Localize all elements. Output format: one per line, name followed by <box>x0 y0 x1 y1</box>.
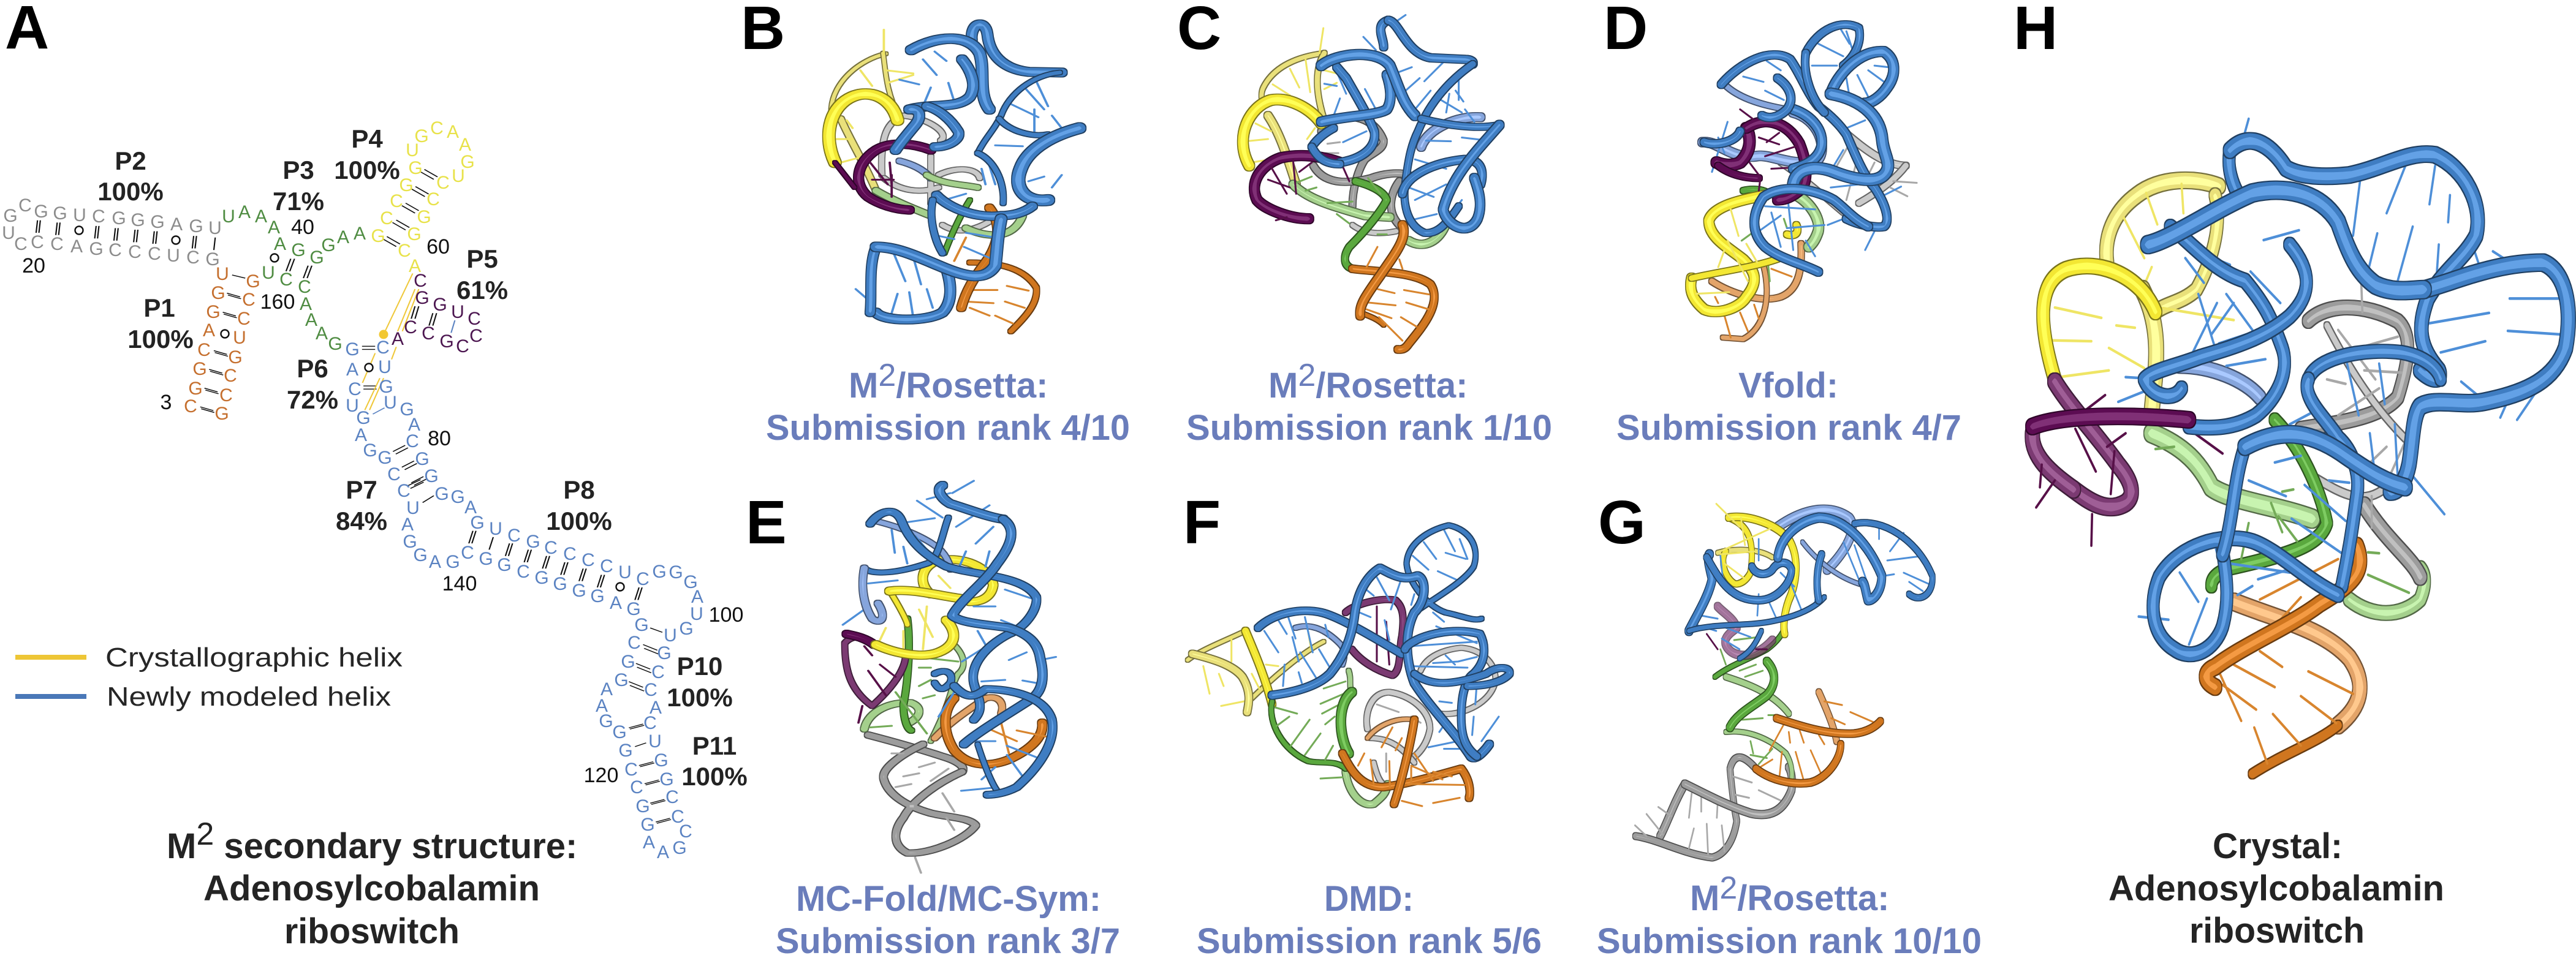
helix labels with percentages: P11 <box>692 731 737 760</box>
helix labels with percentages: P10 <box>677 652 722 681</box>
panel A caption: M <box>167 826 196 866</box>
caption C <box>1186 358 1552 448</box>
legend <box>15 643 403 712</box>
heading: panel letter E: E <box>746 488 787 557</box>
panel A caption: riboswitch <box>284 911 460 951</box>
3D model B <box>829 25 1079 331</box>
caption C: /Rosetta: <box>1316 366 1468 405</box>
helix labels with percentages: P3 <box>282 156 314 184</box>
panel H: crystal structure <box>2013 0 2568 951</box>
caption B: 2 <box>878 358 896 393</box>
caption G: 2 <box>1719 870 1737 906</box>
wobble pair circles and tertiary dot <box>75 227 624 590</box>
residue numbers <box>22 216 743 787</box>
helix labels with percentages: P1 <box>143 293 175 322</box>
helix labels with percentages: P5 <box>466 244 498 273</box>
panel A: secondary structure <box>2 0 748 951</box>
nucleotide sequence letters: UAAAAGGGAA <box>222 202 366 268</box>
panel A caption: 2 <box>196 817 214 852</box>
caption G <box>1597 870 1982 958</box>
residue numbers: 100 <box>709 603 743 627</box>
3D model D <box>1691 25 1917 339</box>
caption G: M <box>1690 878 1719 918</box>
panel F: DMD rank 5/6 <box>1183 488 1542 958</box>
caption G: /Rosetta: <box>1737 878 1889 918</box>
nucleotide sequence letters: UCCAAAG <box>262 263 343 354</box>
residue numbers: 40 <box>291 216 314 239</box>
panel A caption: secondary structure: <box>214 826 577 866</box>
helix labels with percentages: 100% <box>681 762 748 791</box>
helix labels with percentages: 100% <box>334 156 400 184</box>
helix labels with percentages <box>97 124 748 791</box>
helix labels with percentages: P2 <box>115 146 146 175</box>
caption H <box>2108 826 2444 951</box>
residue numbers: 60 <box>426 235 450 258</box>
caption E <box>776 879 1120 958</box>
helix labels with percentages: P7 <box>346 475 377 504</box>
caption H: Crystal: <box>2213 826 2343 866</box>
caption H: Adenosylcobalamin <box>2108 869 2444 908</box>
nucleotide sequence letters: CGGUCCCGCCA <box>392 271 483 356</box>
3D model E <box>843 481 1056 873</box>
legend: Crystallographic helix <box>105 643 403 673</box>
caption D <box>1616 366 1961 448</box>
panel E: MC-Fold/MC-Sym rank 3/7 <box>746 481 1120 958</box>
helix labels with percentages: P6 <box>297 354 328 383</box>
nucleotide sequence letters: GCAUCGUUGGACAGGGCG <box>345 338 439 486</box>
residue numbers: 120 <box>584 764 618 787</box>
helix labels with percentages: 71% <box>273 187 324 216</box>
caption B: Submission rank 4/10 <box>766 408 1130 448</box>
3D model F <box>1188 526 1510 806</box>
helix labels with percentages: 84% <box>336 507 387 535</box>
nucleotide sequence letters: UCCCAGCCCUCG <box>2 223 220 270</box>
residue numbers: 140 <box>442 572 477 595</box>
3D model G <box>1635 504 1933 858</box>
helix labels with percentages: 100% <box>546 507 612 535</box>
caption C: 2 <box>1298 358 1316 393</box>
caption D: Vfold: <box>1738 366 1838 405</box>
heading: panel letter G: G <box>1598 488 1646 557</box>
caption C: Submission rank 1/10 <box>1186 408 1552 448</box>
helix labels with percentages: 72% <box>287 385 338 414</box>
helix labels with percentages: P8 <box>563 475 595 504</box>
nucleotide sequence letters: GCGGUCGGGAGU <box>3 195 222 238</box>
nucleotide sequence letters: GCCGGUGCAAGUCCGGCA <box>371 118 475 276</box>
residue numbers: 160 <box>260 290 295 314</box>
base pair marks, upper region <box>36 170 455 485</box>
base pair marks, lower region <box>407 480 671 823</box>
nucleotide sequence letters: UGGCGCAUCGGCGCCG <box>184 264 260 424</box>
caption F: DMD: <box>1324 879 1414 919</box>
panel B: M2/Rosetta rank 4/10 <box>741 0 1130 448</box>
helix labels with percentages: 100% <box>97 177 164 206</box>
panel D: Vfold rank 4/7 <box>1604 0 1961 448</box>
panel A caption: Adenosylcobalamin <box>203 869 540 908</box>
caption B <box>766 358 1130 448</box>
caption B: /Rosetta: <box>896 366 1048 405</box>
residue numbers: 80 <box>428 427 451 450</box>
heading: panel letter F: F <box>1183 488 1221 557</box>
panel G: M2/Rosetta rank 10/10 <box>1597 488 1982 958</box>
helix labels with percentages: 61% <box>456 276 508 304</box>
caption C: M <box>1268 366 1298 405</box>
caption D: Submission rank 4/7 <box>1616 408 1961 448</box>
residue numbers: 3 <box>161 391 172 414</box>
nucleotide sequence letters <box>2 118 703 862</box>
helix labels with percentages: 100% <box>667 683 733 712</box>
caption H: riboswitch <box>2189 911 2365 951</box>
panel C: M2/Rosetta rank 1/10 <box>1177 0 1552 448</box>
caption B: M <box>849 366 878 405</box>
3D model H <box>2032 119 2568 774</box>
helix labels with percentages: 100% <box>127 325 194 353</box>
nucleotide sequence letters: CGGAUAGGAGGUCGCCCCUCGGGAUGUGCCACUGGCCCGAAGGCCGGGAAGGCGGAGGGGCGGC <box>397 481 703 862</box>
helix labels with percentages: P4 <box>351 124 383 153</box>
caption E: MC-Fold/MC-Sym: <box>796 879 1101 919</box>
residue numbers: 20 <box>22 254 45 277</box>
legend: Newly modeled helix <box>107 682 391 712</box>
panel A caption <box>167 817 577 951</box>
caption F <box>1197 879 1542 958</box>
3D model C <box>1243 15 1499 350</box>
